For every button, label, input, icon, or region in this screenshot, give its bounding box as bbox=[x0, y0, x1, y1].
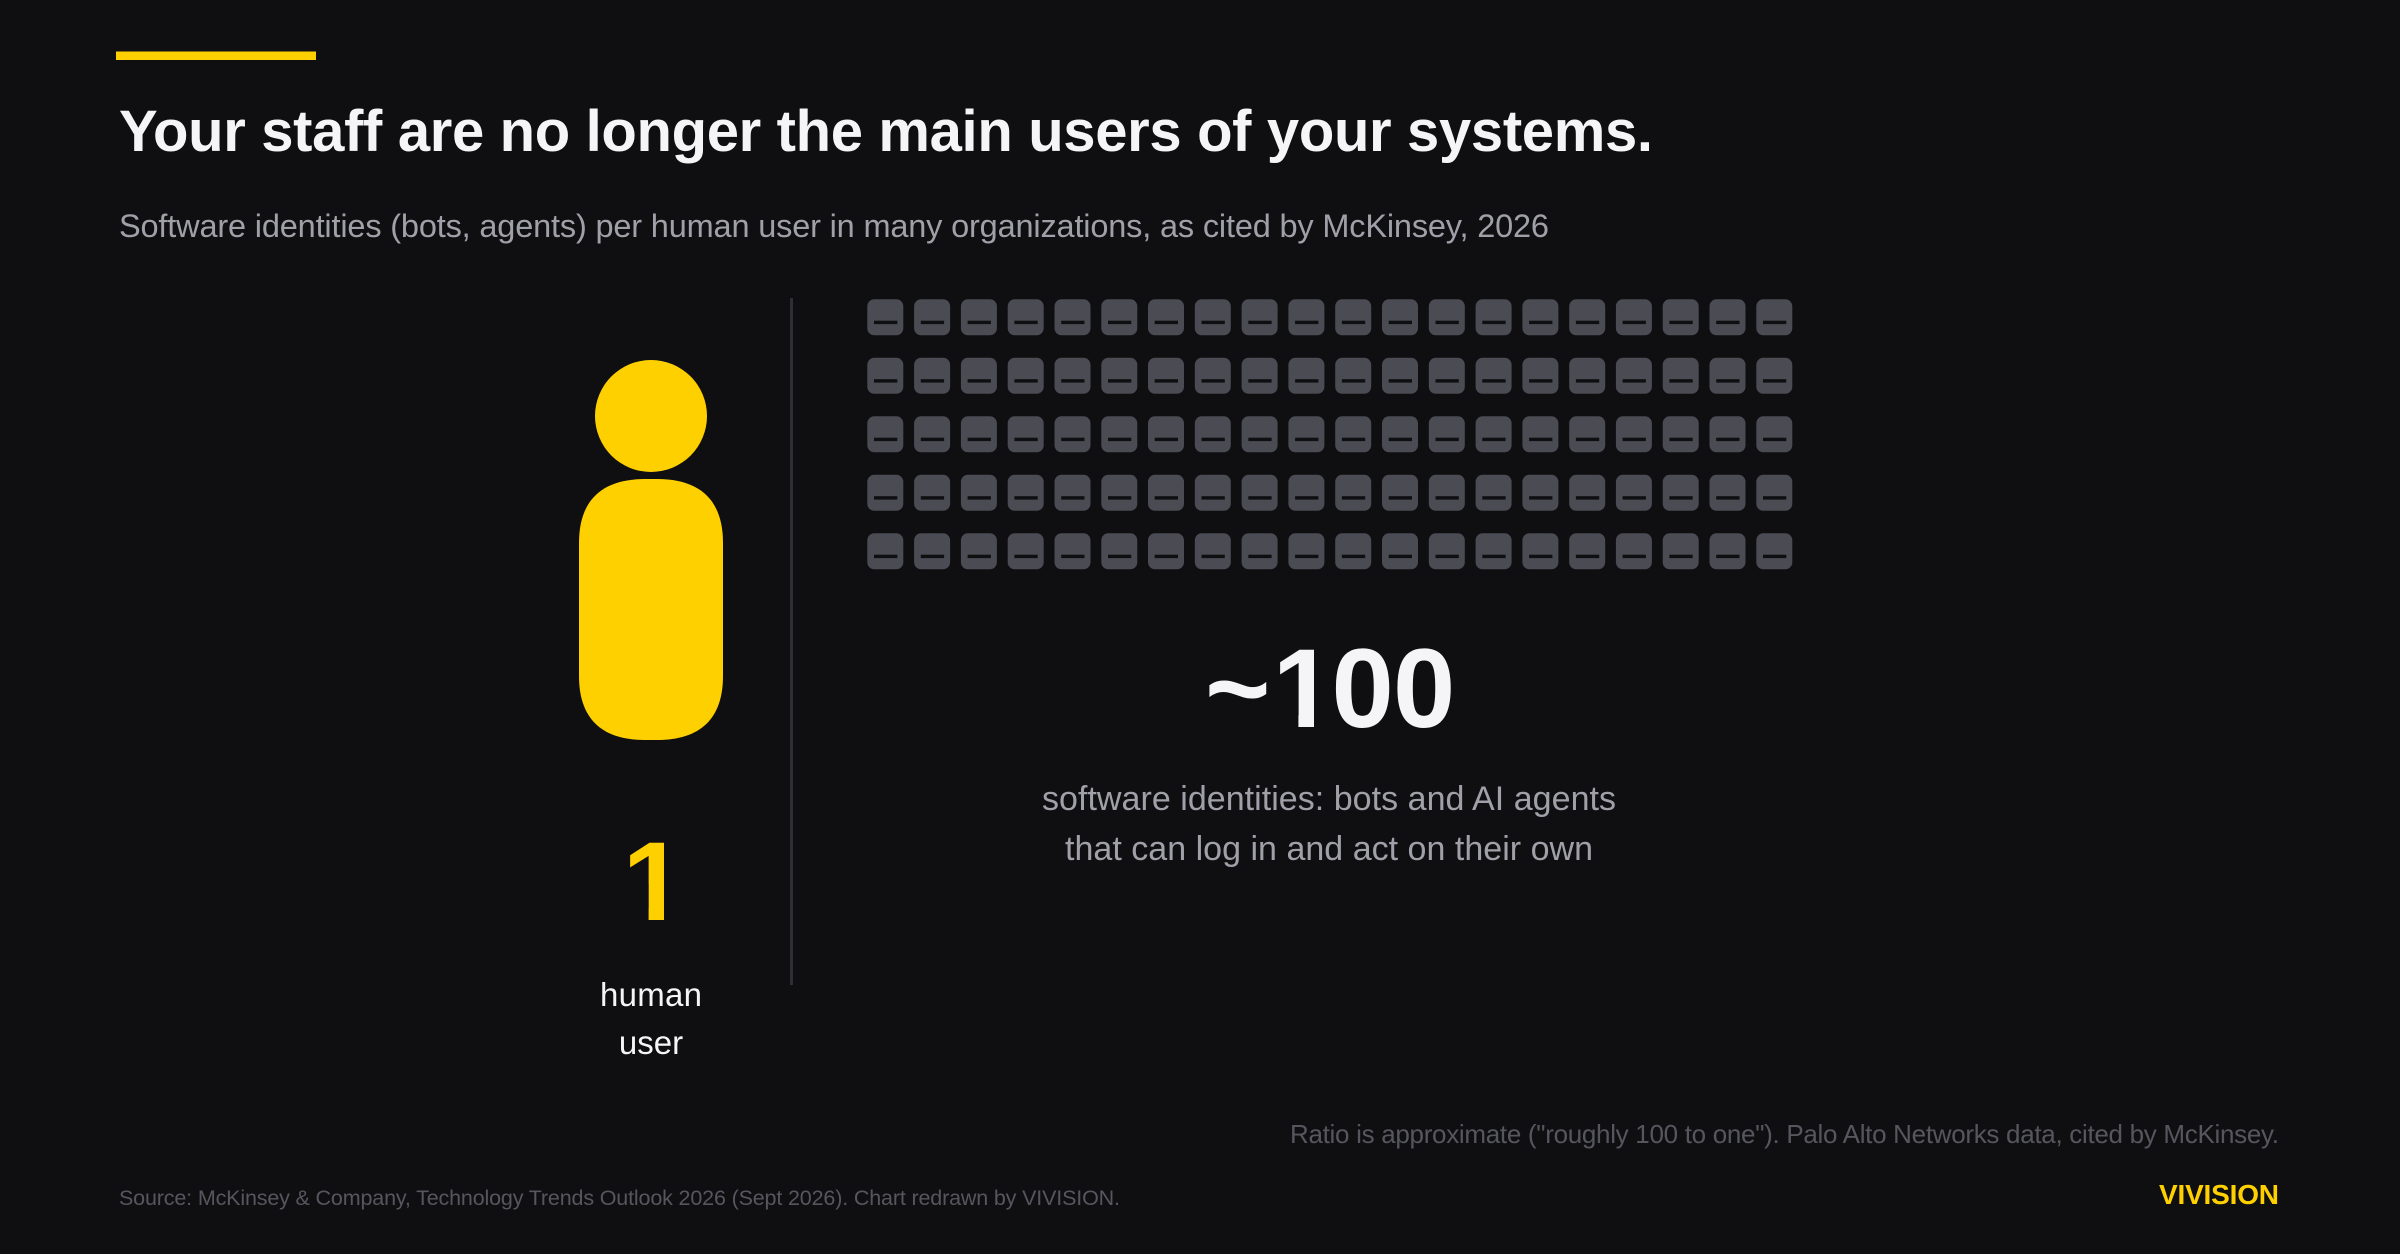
footnote: ratio note: Ratio is approximate ("roughly 100 to one"). Palo Alto Networks data, cited by McKinsey. bbox=[1290, 1119, 2279, 1149]
panel: human user bbox=[579, 360, 723, 1061]
label: human user: human bbox=[600, 976, 702, 1013]
number: ~100: ~100 bbox=[1205, 626, 1455, 751]
source line: Source: McKinsey & Company, Technology Trends Outlook 2026 (Sept 2026). Chart redrawn by VIVISION. bbox=[119, 1186, 1120, 1210]
accent bar bbox=[116, 52, 316, 60]
grid of bot icons bbox=[867, 299, 1792, 569]
label: human user: user bbox=[619, 1024, 683, 1061]
description bbox=[1042, 780, 1616, 868]
title: Your staff are no longer the main users of your systems. bbox=[119, 99, 1653, 164]
label: human user bbox=[600, 976, 702, 1061]
description: software identities: bots and AI agents bbox=[1042, 780, 1616, 818]
number: 1: 1 bbox=[622, 819, 685, 944]
divider bbox=[790, 298, 793, 985]
panel: software identities bbox=[867, 299, 1792, 868]
subtitle: Software identities (bots, agents) per human user in many organizations, as cited by McKinsey, 2026 bbox=[119, 208, 1549, 244]
icon: person bbox=[579, 360, 723, 740]
description: that can log in and act on their own bbox=[1065, 830, 1593, 868]
brand mark: VIVISION bbox=[2159, 1179, 2279, 1210]
